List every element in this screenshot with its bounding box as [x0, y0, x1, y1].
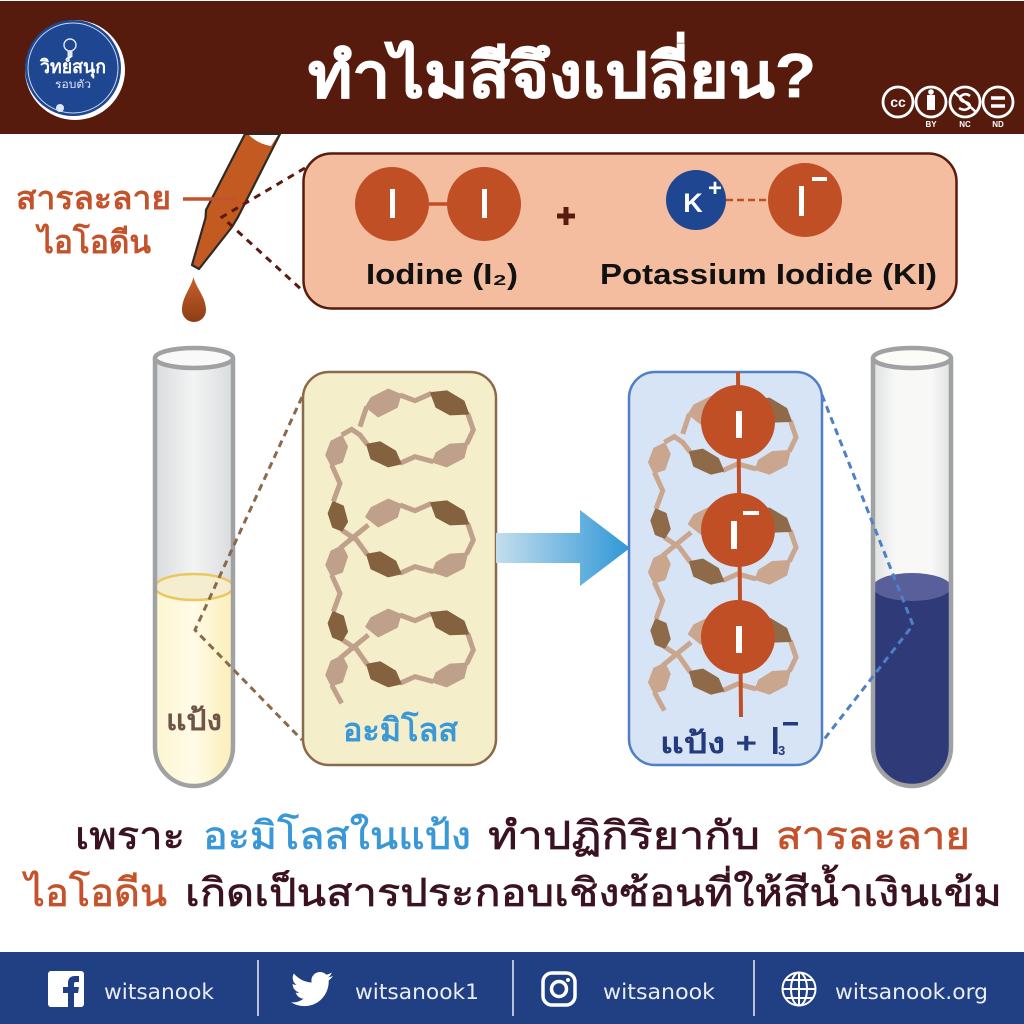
label: starch + triiodide: 3	[778, 743, 785, 758]
iodine drop	[182, 277, 206, 322]
creative commons licence icons: ND	[992, 120, 1004, 129]
iodine chain	[701, 372, 775, 717]
label: iodine solution: สารละลาย	[16, 180, 171, 216]
label: iodine solution	[16, 180, 236, 260]
logo: witsanook badge: วิทย์สนุก	[40, 56, 106, 79]
footer: instagram	[543, 973, 716, 1005]
creative commons licence icons	[883, 87, 1013, 129]
plus sign	[557, 207, 575, 225]
footer: website globe	[782, 972, 988, 1006]
title: ทำไมสีจึงเปลี่ยน?	[308, 32, 816, 111]
explanation text	[22, 814, 1002, 915]
panel: amylose	[303, 372, 496, 765]
footer: twitter	[291, 972, 479, 1006]
footer: website globe: witsanook.org	[835, 980, 988, 1004]
explanation text: อะมิโลสในแป้ง	[203, 814, 471, 858]
footer: facebook: witsanook	[104, 980, 215, 1004]
potassium iodide molecule KI: K	[683, 188, 703, 218]
explanation text: ไอโอดีน	[22, 871, 167, 915]
label: iodine solution: ไอโอดีน	[35, 223, 151, 260]
panel: starch iodine complex	[629, 372, 822, 765]
label: starch + triiodide: แป้ง +	[660, 728, 757, 760]
label: amylose: อะมิโลส	[343, 711, 458, 748]
test tube: starch: แป้ง	[166, 705, 222, 737]
explanation text: เกิดเป็นสารประกอบเชิงซ้อนที่ให้สีน้ำเงินเข้ม	[185, 864, 1002, 915]
creative commons licence icons: BY	[925, 120, 937, 129]
potassium iodide molecule KI: +	[708, 175, 722, 202]
label: starch + triiodide	[660, 722, 798, 760]
creative commons licence icons: cc	[890, 94, 906, 110]
explanation text: สารละลาย	[776, 815, 970, 858]
explanation text: เพราะ	[75, 815, 185, 858]
creative commons licence icons: NC	[959, 120, 971, 129]
zoom lines: dropper to molecule panel	[222, 168, 305, 291]
logo: witsanook badge: รอบตัว	[55, 79, 91, 91]
footer: facebook	[48, 971, 215, 1007]
potassium iodide molecule KI	[666, 163, 842, 237]
footer: instagram: witsanook	[603, 980, 716, 1004]
label: potassium iodide: Potassium Iodide (KI)	[600, 259, 937, 291]
zoom lines: complex panel to blue tube	[822, 395, 913, 742]
amylose chain	[327, 390, 473, 703]
zoom lines: starch tube to amylose panel	[195, 397, 302, 740]
label: iodine: Iodine (I₂)	[366, 259, 518, 291]
iodine molecule I2	[355, 167, 521, 241]
header bar	[0, 1, 1024, 134]
footer: twitter: witsanook1	[355, 980, 479, 1004]
dropper pipette	[192, 134, 280, 269]
explanation text: ทำปฏิกิริยากับ	[488, 815, 760, 858]
test tube: dark blue complex	[873, 348, 951, 786]
panel: iodine solution molecules	[304, 154, 956, 308]
reaction arrow	[496, 510, 630, 586]
amylose chain with iodine	[649, 397, 796, 711]
logo: witsanook badge	[25, 20, 125, 120]
test tube: starch	[155, 348, 233, 786]
footer bar	[0, 952, 1024, 1024]
